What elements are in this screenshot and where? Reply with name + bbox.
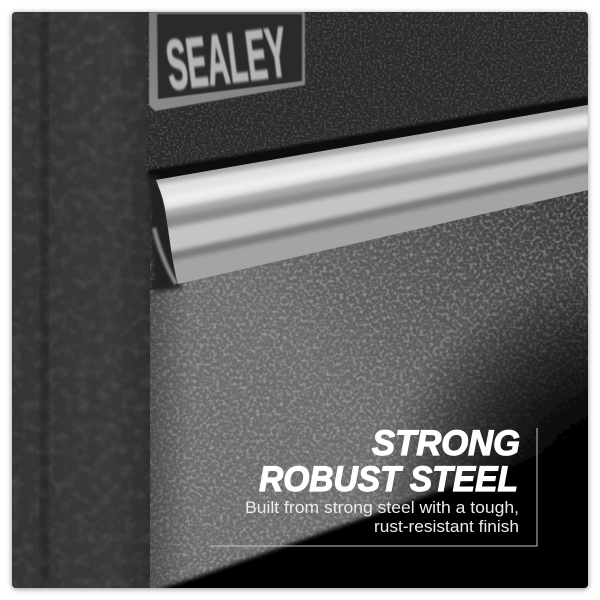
top drawer front <box>146 12 588 172</box>
handle recess <box>148 176 182 292</box>
heading: ROBUST STEEL <box>259 460 518 499</box>
dark base shadow <box>154 448 588 588</box>
frame lines <box>210 428 537 546</box>
heading: STRONG <box>372 424 520 463</box>
heading <box>259 424 520 499</box>
lower drawer front <box>150 190 588 588</box>
description text: rust-resistant finish <box>374 517 519 536</box>
shadow above handle <box>148 96 588 182</box>
description text: Built from strong steel with a tough, <box>245 498 519 517</box>
steel bar handle <box>150 102 590 292</box>
description text <box>245 498 519 536</box>
handle open end <box>154 228 176 284</box>
cabinet side column <box>12 12 150 588</box>
SEALEY badge: SEALEY <box>162 12 291 105</box>
